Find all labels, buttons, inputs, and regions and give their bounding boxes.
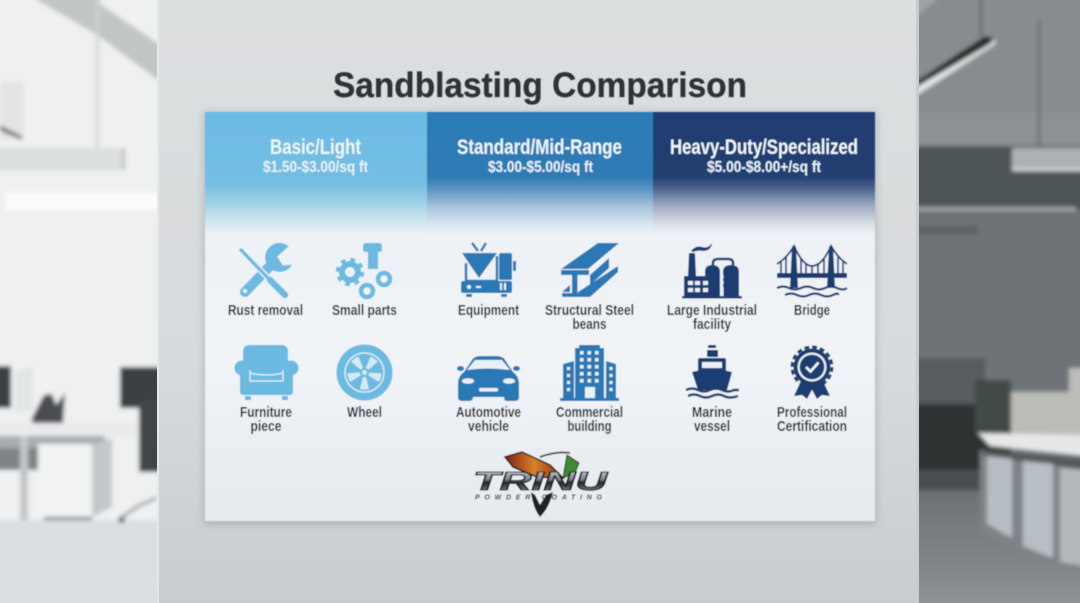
column header: Basic/Light	[205, 112, 427, 236]
logo: TRINU Powder Coating	[473, 452, 609, 517]
column header: Basic/Light: $1.50-$3.00/sq ft	[263, 159, 368, 176]
item: Bridge: Bridge	[794, 302, 830, 319]
item: Structural Steel beams: Structural Steel	[545, 302, 634, 319]
item: Structural Steel beams	[545, 243, 634, 333]
item: Professional Certification	[777, 347, 847, 435]
item: Automotive vehicle: Automotive	[456, 404, 521, 421]
item: Rust removal	[228, 241, 303, 319]
item: Small parts	[332, 243, 397, 319]
item: Marine vessel	[686, 345, 739, 435]
item: Marine vessel: vessel	[694, 418, 730, 435]
column header: Standard/Mid-Range: $3.00-$5.00/sq ft	[488, 159, 593, 176]
item: Commercial building	[556, 345, 623, 435]
item: Equipment	[458, 243, 519, 319]
item: Commercial building: Commercial	[556, 404, 623, 421]
item: Large Industrial facility: Large Industrial	[667, 302, 757, 319]
column header: Heavy-Duty/Specialized	[653, 112, 875, 236]
background: grey wall	[157, 0, 918, 603]
item: Large Industrial facility: facility	[693, 316, 732, 333]
wall edge highlights	[157, 0, 919, 603]
item: Wheel: Wheel	[347, 404, 382, 421]
item: Wheel	[336, 344, 392, 421]
item: Large Industrial facility	[667, 243, 757, 333]
item: Structural Steel beams: beans	[572, 316, 606, 333]
item: Small parts: Small parts	[332, 302, 397, 319]
column header: Standard/Mid-Range	[427, 112, 653, 236]
item: Rust removal: Rust removal	[228, 302, 303, 319]
background: left office photo	[0, 0, 162, 603]
item: Equipment: Equipment	[458, 302, 519, 319]
title: Sandblasting Comparison	[333, 66, 747, 105]
logo: TRINU Powder Coating: POWDER COATING	[475, 494, 603, 502]
column header: Heavy-Duty/Specialized: Heavy-Duty/Specialized	[670, 136, 858, 159]
column header: Basic/Light: Basic/Light	[270, 136, 361, 159]
item: Furniture piece: piece	[250, 418, 282, 435]
item: Automotive vehicle: vehicle	[468, 418, 509, 435]
item: Furniture piece: Furniture	[240, 404, 292, 421]
item: Furniture piece	[234, 345, 298, 435]
item: Marine vessel: Marine	[692, 404, 732, 421]
item: Professional Certification: Professional	[777, 404, 847, 421]
comparison board panel	[205, 112, 875, 521]
column header: Standard/Mid-Range: Standard/Mid-Range	[457, 136, 622, 159]
item: Commercial building: building	[568, 418, 612, 435]
logo: TRINU Powder Coating: TRINU	[473, 466, 609, 496]
item: Professional Certification: Certification	[777, 418, 847, 435]
item: Automotive vehicle	[456, 356, 521, 435]
item: Bridge	[777, 245, 847, 319]
background: right office photo	[915, 0, 1080, 603]
column header: Heavy-Duty/Specialized: $5.00-$8.00+/sq ft	[707, 159, 821, 176]
board shadow	[203, 112, 877, 525]
